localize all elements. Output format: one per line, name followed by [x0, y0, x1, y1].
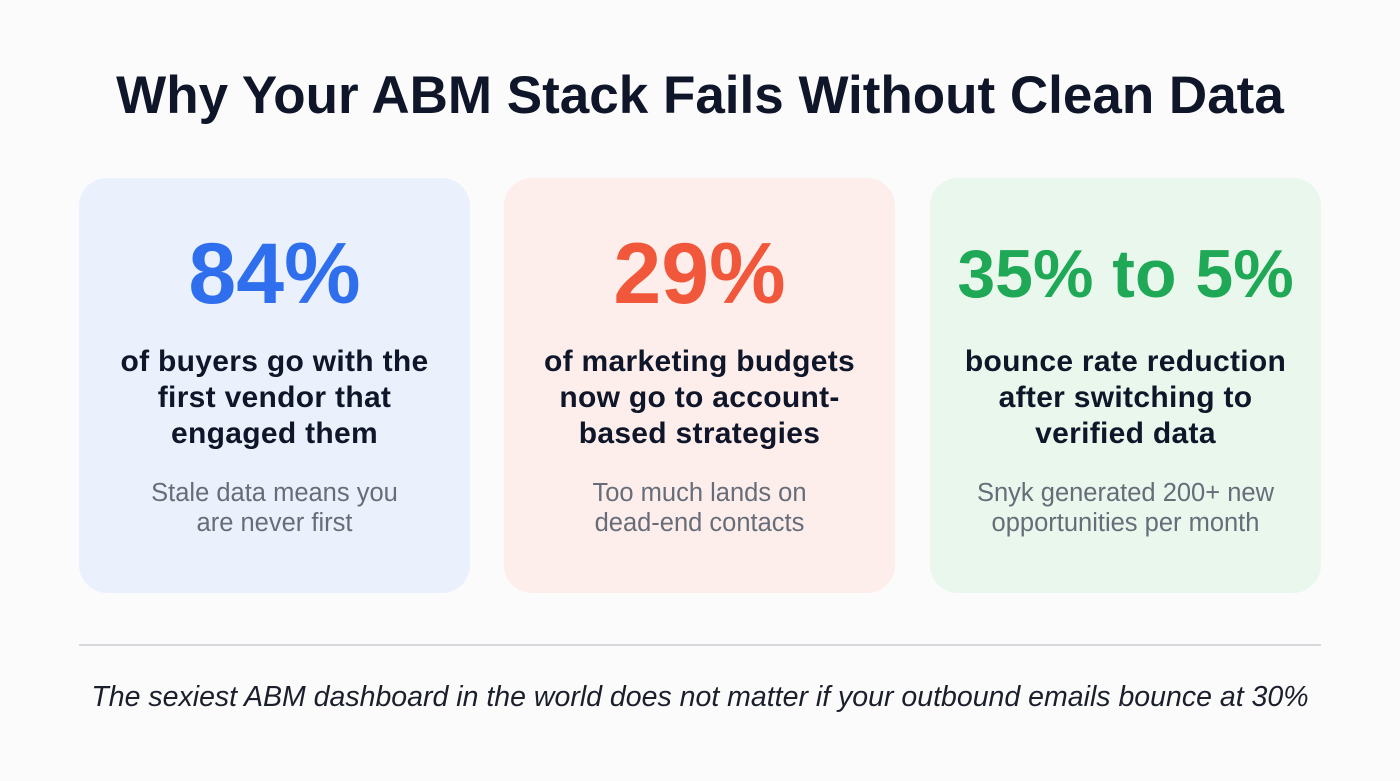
note: dead-end contacts [595, 509, 804, 537]
footer quote: The sexiest ABM dashboard in the world does not matter if your outbound emails bounce at 30% [91, 681, 1309, 713]
stat: 29%: 29% [613, 226, 786, 322]
heading: first vendor that [158, 381, 391, 414]
heading [544, 345, 855, 450]
note: Stale data means you [151, 479, 398, 507]
note [977, 479, 1274, 537]
heading: engaged them [171, 417, 378, 450]
title: Why Your ABM Stack Fails Without Clean Data [116, 66, 1284, 125]
heading [965, 345, 1286, 450]
note: are never first [197, 509, 352, 537]
note: Snyk generated 200+ new [977, 479, 1274, 507]
heading: based strategies [579, 417, 820, 450]
panel: bounce [930, 178, 1321, 593]
panel: budgets [504, 178, 895, 593]
heading: of marketing budgets [544, 345, 855, 378]
panel: buyers [79, 178, 470, 593]
note: opportunities per month [992, 509, 1259, 537]
stat: 35% to 5%: 35% to 5% [957, 236, 1294, 312]
heading: now go to account- [559, 381, 840, 414]
heading: verified data [1035, 417, 1216, 450]
note: Too much lands on [592, 479, 807, 507]
heading [120, 345, 428, 450]
note [151, 479, 398, 537]
note [592, 479, 807, 537]
heading: bounce rate reduction [965, 345, 1286, 378]
heading: of buyers go with the [120, 345, 428, 378]
stat: 84%: 84% [188, 226, 361, 322]
heading: after switching to [999, 381, 1252, 414]
